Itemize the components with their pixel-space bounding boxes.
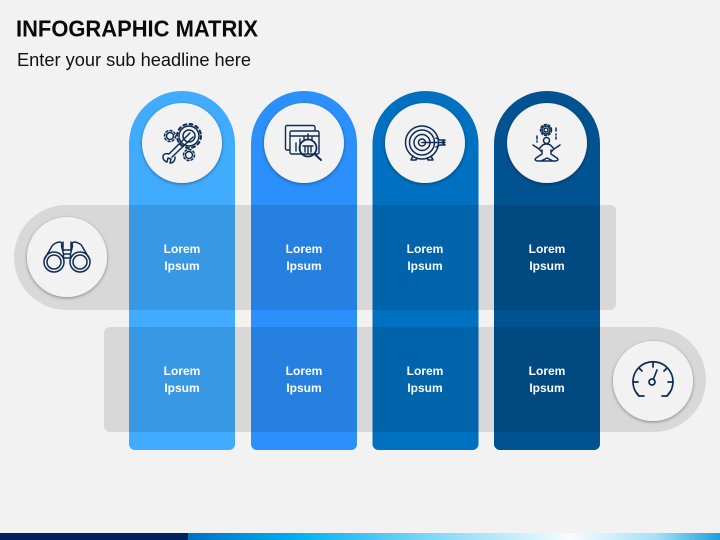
icon circle: binoculars bbox=[27, 217, 107, 297]
cell labels: Lorem bbox=[164, 364, 200, 378]
icon circle: analytics bbox=[264, 103, 344, 183]
cell labels: Lorem bbox=[286, 364, 322, 378]
cell labels: Ipsum bbox=[164, 259, 200, 273]
icon circle: tools bbox=[142, 103, 222, 183]
cell labels: Lorem bbox=[164, 242, 200, 256]
cell labels bbox=[164, 242, 565, 395]
cell labels: Ipsum bbox=[164, 381, 200, 395]
cell labels: Ipsum bbox=[286, 259, 322, 273]
footer bar bbox=[0, 533, 720, 540]
cell labels: Ipsum bbox=[407, 259, 443, 273]
column 2 bbox=[251, 91, 357, 450]
cell labels: Ipsum bbox=[407, 381, 443, 395]
row band 2 bbox=[104, 327, 706, 432]
row band 1 bbox=[14, 205, 616, 310]
cell labels: Lorem bbox=[407, 364, 443, 378]
column 3 bbox=[372, 91, 479, 450]
icon circle: target bbox=[385, 103, 465, 183]
column 1 bbox=[129, 91, 235, 450]
cell labels: Ipsum bbox=[529, 259, 565, 273]
cell labels: Lorem bbox=[407, 242, 443, 256]
title: INFOGRAPHIC MATRIX bbox=[16, 16, 259, 42]
cell labels: Lorem bbox=[286, 242, 322, 256]
column 4 bbox=[494, 91, 600, 450]
icon circle: meditation bbox=[507, 103, 587, 183]
cell labels: Ipsum bbox=[529, 381, 565, 395]
cell labels: Ipsum bbox=[286, 381, 322, 395]
sub headline: Enter your sub headline here bbox=[17, 50, 251, 70]
cell labels: Lorem bbox=[529, 242, 565, 256]
icon circle: speedometer bbox=[613, 341, 693, 421]
cell labels: Lorem bbox=[529, 364, 565, 378]
